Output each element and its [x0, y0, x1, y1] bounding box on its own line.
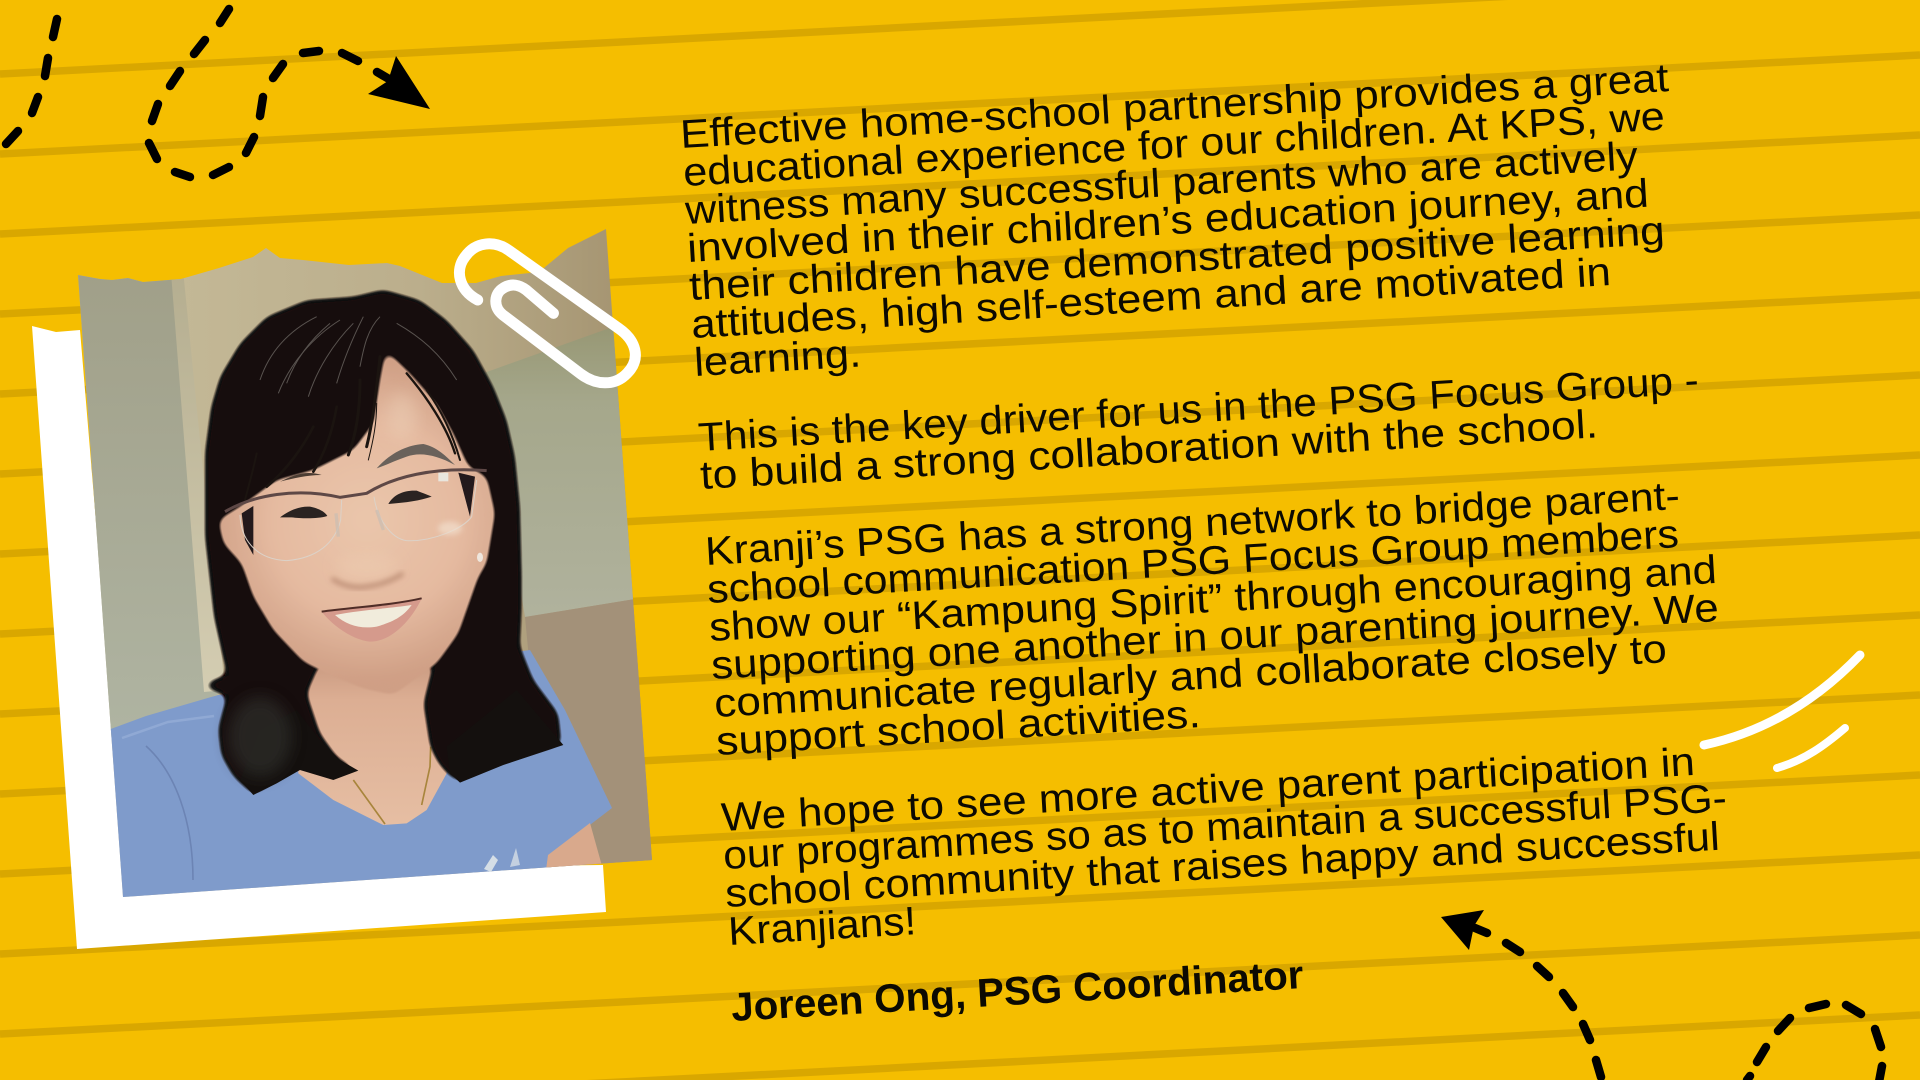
photo bangs strands: [266, 372, 461, 488]
photo mouth: [322, 598, 422, 642]
text block: paragraph 1: educational experience for our children. At KPS, we: [682, 94, 1666, 195]
text block: paragraph 2: This is the key driver for us in the PSG Focus Group -: [697, 358, 1700, 460]
photo shirt: [100, 650, 612, 910]
text block: paragraph 1: attitudes, high self-esteem and are motivated in: [690, 250, 1612, 347]
photo neck and chest: [298, 668, 447, 825]
text block: paragraph 1: Effective home-school partnership provides a great: [679, 56, 1670, 157]
icon: dashed squiggle top left: [6, 19, 57, 144]
photo: smiling woman with glasses: [78, 229, 652, 897]
signature: Joreen Ong: Joreen Ong, PSG Coordinator: [730, 953, 1305, 1030]
icon: dashed curve bottom right: [1747, 1004, 1882, 1080]
text block: paragraph 2: [697, 358, 1700, 498]
photo background wall: [78, 229, 652, 897]
panel: white torn paper behind photo: [32, 326, 606, 949]
nose: [337, 553, 397, 580]
text block: paragraph 4: We hope to see more active parent participation in: [720, 740, 1696, 840]
text block: paragraph 4: [720, 740, 1728, 954]
hair highlights crown: [260, 317, 457, 397]
text block: paragraph 2: to build a strong collaboration with the school.: [699, 402, 1599, 498]
hair highlights lower left: [228, 697, 292, 777]
text block: paragraph 4: Kranjians!: [727, 899, 917, 954]
icon: paperclip: [459, 244, 635, 383]
text block: paragraph 4: school community that raises happy and successful: [724, 815, 1721, 916]
icon: white swoosh marks: [1704, 655, 1860, 768]
text block: paragraph 1: witness many successful parents who are actively: [683, 134, 1639, 233]
photo arm: [546, 823, 602, 870]
text block: paragraph 3: show our “Kampung Spirit” through encouraging and: [708, 548, 1718, 650]
text block: paragraph 3: school communication PSG Focus Group members: [706, 512, 1680, 612]
hair tips left bottom: [246, 752, 358, 795]
text block: paragraph 3: supporting one another in our parenting journey. We: [710, 586, 1720, 688]
text block: paragraph 1: their children have demonstrated positive learning: [688, 209, 1666, 309]
hair tips right bottom: [451, 740, 564, 783]
photo hair: [204, 289, 563, 795]
text block: paragraph 1: involved in their children’s education journey, and: [686, 172, 1650, 271]
forehead highlight: [390, 396, 415, 432]
text block: paragraph 4: our programmes so as to maintain a successful PSG-: [722, 776, 1728, 878]
photo glasses: [225, 470, 487, 561]
text block: paragraph 1: learning.: [693, 331, 862, 385]
arrow: dashed looping arrow top: [149, 9, 430, 177]
text block: paragraph 3: [704, 474, 1720, 764]
arrow: dashed arrow bottom pointing up-left: [1441, 910, 1601, 1077]
text block: paragraph 3: Kranji’s PSG has a strong network to bridge parent-: [704, 474, 1681, 574]
text block: paragraph 3: support school activities.: [715, 692, 1202, 764]
text block: paragraph 3: communicate regularly and collaborate closely to: [713, 627, 1668, 726]
photo eyebrows and eyes: [280, 444, 455, 518]
photo face: [218, 350, 495, 695]
text block: paragraph 1: [679, 56, 1670, 385]
